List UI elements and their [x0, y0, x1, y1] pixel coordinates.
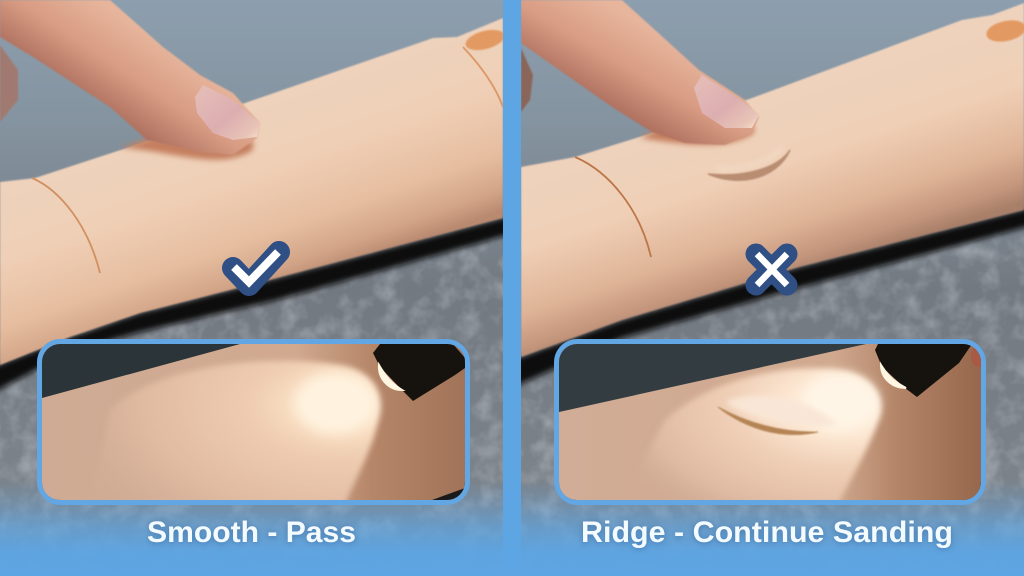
flashlight lens [379, 365, 402, 390]
pressing finger [0, 0, 260, 155]
skin base [42, 344, 465, 500]
upper joint seam [463, 47, 503, 107]
cross outline [756, 254, 787, 285]
shadow under arm [521, 206, 1024, 388]
cross stroke [757, 254, 787, 285]
ridge on arm [708, 147, 790, 180]
pressing finger [521, 0, 759, 145]
bottom blue fade, right [521, 480, 1024, 576]
felt texture [0, 238, 503, 534]
panel: smooth pass photo [0, 0, 503, 548]
grey felt surface [521, 0, 1024, 576]
joint hole [986, 20, 1024, 42]
caption: smooth pass: Smooth - Pass [147, 516, 356, 549]
finger contact shadow [640, 125, 755, 145]
icon: cross mark [756, 254, 787, 285]
background finger [0, 45, 18, 122]
inset frame [556, 342, 984, 502]
ridge highlight [722, 151, 778, 170]
ridge shadow [718, 407, 818, 434]
icon: check mark [233, 252, 279, 285]
inset photo [42, 344, 465, 505]
felt texture [521, 236, 1024, 531]
ridge shadow [708, 150, 790, 180]
skin base [559, 344, 981, 500]
centre divider [503, 0, 521, 576]
ridge highlight [725, 396, 838, 426]
flashlight body [373, 344, 465, 401]
mannequin arm [521, 3, 1024, 357]
background fingertip [971, 345, 985, 367]
hot spot [802, 374, 878, 430]
flashlight body [875, 344, 972, 397]
corner shadow [432, 488, 465, 500]
inset frame [40, 342, 468, 502]
hot spot [295, 373, 375, 433]
check stroke [234, 252, 278, 282]
flashlight lens [881, 365, 906, 388]
light beam [90, 361, 380, 505]
inset: smooth under flashlight [40, 342, 468, 505]
dark background wedge [559, 344, 866, 412]
check outline [233, 252, 279, 285]
finger contact shadow [120, 138, 253, 160]
joint hole [464, 29, 503, 51]
grey felt surface [0, 0, 503, 576]
fingernail [694, 75, 759, 128]
panel: ridge photo [521, 0, 1024, 548]
inset: ridge under flashlight [556, 342, 985, 505]
bottom blue fade, left [0, 480, 503, 576]
shadow under arm [0, 215, 503, 394]
background finger [521, 48, 533, 112]
forearm seam [32, 178, 100, 273]
inset photo [559, 344, 985, 505]
mannequin arm [0, 18, 503, 365]
forearm seam [575, 157, 651, 257]
caption: ridge continue sanding: Ridge - Continue Sanding [581, 516, 953, 549]
dark background wedge [42, 344, 240, 398]
fingernail [195, 85, 260, 140]
light beam [651, 366, 885, 500]
